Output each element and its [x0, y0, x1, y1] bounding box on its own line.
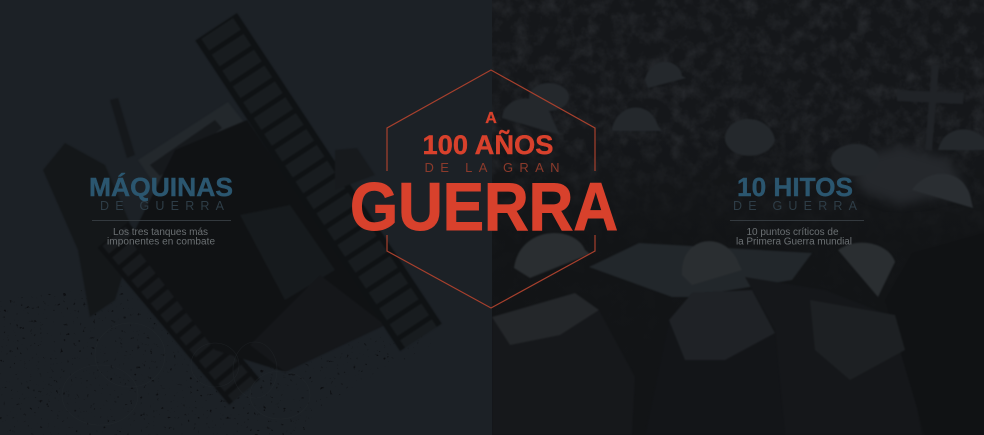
helmet front left	[514, 233, 590, 278]
helmet 1	[646, 63, 684, 88]
barbed wire	[87, 342, 308, 424]
panel: Máquinas de guerra text	[89, 172, 233, 248]
divider	[92, 220, 231, 221]
tank hull top	[138, 102, 250, 200]
title line: A: A	[485, 110, 497, 127]
helmet 5	[529, 83, 569, 111]
soldier backs	[492, 278, 904, 380]
helmet 4	[502, 98, 560, 135]
helmet 6	[832, 144, 876, 176]
description: la Primera Guerra mundial	[736, 236, 852, 248]
soldiers illustration	[492, 63, 984, 380]
title	[350, 110, 618, 245]
description	[736, 227, 852, 248]
helmet 3	[725, 119, 775, 156]
trench wall texture	[492, 0, 984, 181]
description: imponentes en combate	[107, 236, 215, 248]
lower shadow	[492, 177, 984, 434]
helmets	[502, 62, 984, 208]
table with papers	[589, 243, 812, 297]
ground texture	[0, 285, 445, 435]
tank main track	[195, 13, 442, 351]
description: 10 puntos críticos de	[746, 227, 839, 238]
title line: 100 años: 100 AÑOS	[422, 129, 554, 160]
divider	[730, 220, 864, 221]
tank illustration	[43, 13, 442, 405]
tank hull body	[130, 120, 385, 372]
heading: Máquinas: MÁQUINAS	[89, 172, 233, 202]
panel: 10 hitos de guerra text	[730, 172, 864, 248]
hexagon outline	[387, 70, 595, 308]
helmet front right	[838, 243, 895, 297]
rubble pile	[855, 146, 960, 204]
tank side sponson	[336, 149, 373, 185]
panel: right soldiers photo	[492, 0, 984, 435]
helmet 2	[612, 108, 662, 131]
title line: Guerra: GUERRA	[350, 169, 618, 245]
title line: de la gran: DE LA GRAN	[424, 160, 560, 175]
tank gun barrel	[111, 98, 134, 157]
description	[107, 227, 215, 248]
description: Los tres tanques más	[113, 227, 208, 238]
helmet 7	[928, 176, 973, 208]
subheading: de guerra: DE GUERRA	[100, 199, 225, 213]
subheading: de guerra: DE GUERRA	[733, 199, 858, 213]
wooden cross	[897, 65, 964, 150]
panel: left tank photo	[0, 14, 442, 435]
tank left track	[43, 143, 260, 405]
helmet 8	[938, 129, 984, 150]
heading: 10 hitos: 10 HITOS	[737, 172, 853, 202]
foreground helmets	[514, 233, 895, 297]
helmet front center	[694, 241, 728, 250]
